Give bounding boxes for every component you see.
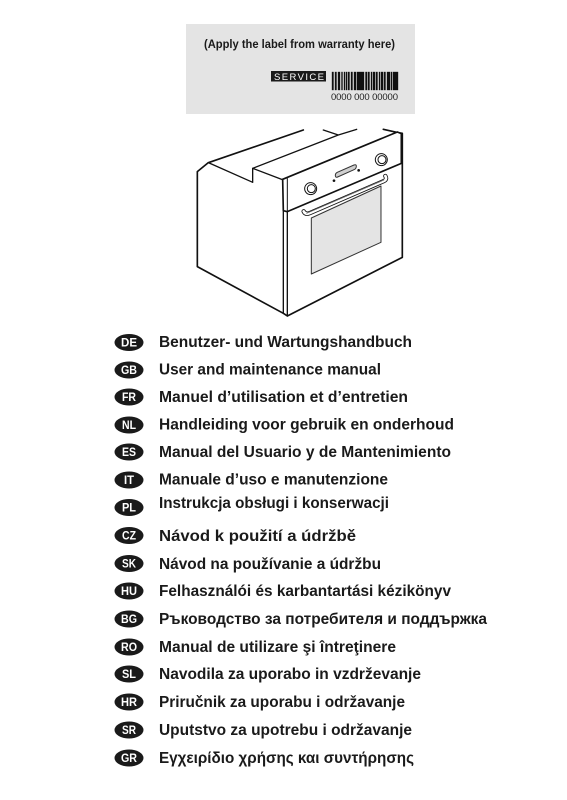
row GB: GB [121, 365, 137, 377]
language list [114, 334, 487, 767]
control knob right [375, 154, 387, 166]
display [335, 165, 356, 177]
row ES: Manual del Usuario y de Mantenimiento [159, 444, 451, 461]
row BG: Ръководство за потребителя и поддържка [159, 611, 487, 628]
row HR: Priručnik za uporabu i održavanje [159, 694, 405, 711]
service tag: SERVICE [274, 72, 324, 83]
row SR: Uputstvo za upotrebu i održavanje [159, 722, 412, 739]
oven front panel [283, 132, 401, 212]
row GR: GR [121, 753, 138, 765]
row RO: RO [121, 642, 137, 654]
cabinet body [197, 129, 402, 316]
row HR: HR [121, 697, 138, 709]
row DE: DE [121, 338, 137, 350]
row SK: SK [122, 558, 137, 570]
row HU: Felhasználói és karbantartási kézikönyv [159, 583, 451, 600]
row RO: Manual de utilizare şi întreţinere [159, 639, 396, 656]
row BG: BG [121, 614, 137, 626]
row IT: Manuale d’uso e manutenzione [159, 472, 388, 488]
door window [311, 186, 381, 274]
row GB: User and maintenance manual [159, 362, 381, 378]
row SL: SL [122, 669, 136, 681]
row IT: IT [124, 475, 134, 487]
row PL: PL [122, 502, 136, 514]
oven door [283, 211, 287, 316]
door handle [304, 176, 386, 214]
indicator lights [333, 169, 360, 182]
row SL: Navodila za uporabo in vzdrževanje [159, 666, 421, 683]
barcode number: 0000 000 00000 [331, 92, 398, 103]
panel: warranty label area [186, 24, 415, 114]
row PL: Instrukcja obsługi i konserwacji [159, 495, 389, 512]
row CZ: CZ [122, 530, 136, 542]
control knob left [305, 183, 317, 195]
row GR: Εγχειρίδιο χρήσης και συντήρησης [159, 750, 414, 767]
row NL: Handleiding voor gebruik en onderhoud [159, 416, 454, 434]
barcode [332, 72, 398, 90]
row NL: NL [122, 420, 136, 432]
row FR: FR [122, 392, 137, 404]
row SR: SR [122, 725, 137, 737]
label instruction: (Apply the label from warranty here) [204, 39, 395, 51]
row ES: ES [122, 447, 136, 459]
row DE: Benutzer- und Wartungshandbuch [159, 334, 412, 351]
oven illustration [197, 129, 402, 316]
row PL [114, 495, 389, 516]
row CZ: Návod k použití a údržbě [159, 528, 356, 545]
cabinet inner edges [208, 129, 357, 182]
row FR: Manuel d’utilisation et d’entretien [159, 389, 408, 406]
row HU: HU [121, 586, 137, 598]
row SK: Návod na používanie a údržbu [159, 556, 381, 573]
